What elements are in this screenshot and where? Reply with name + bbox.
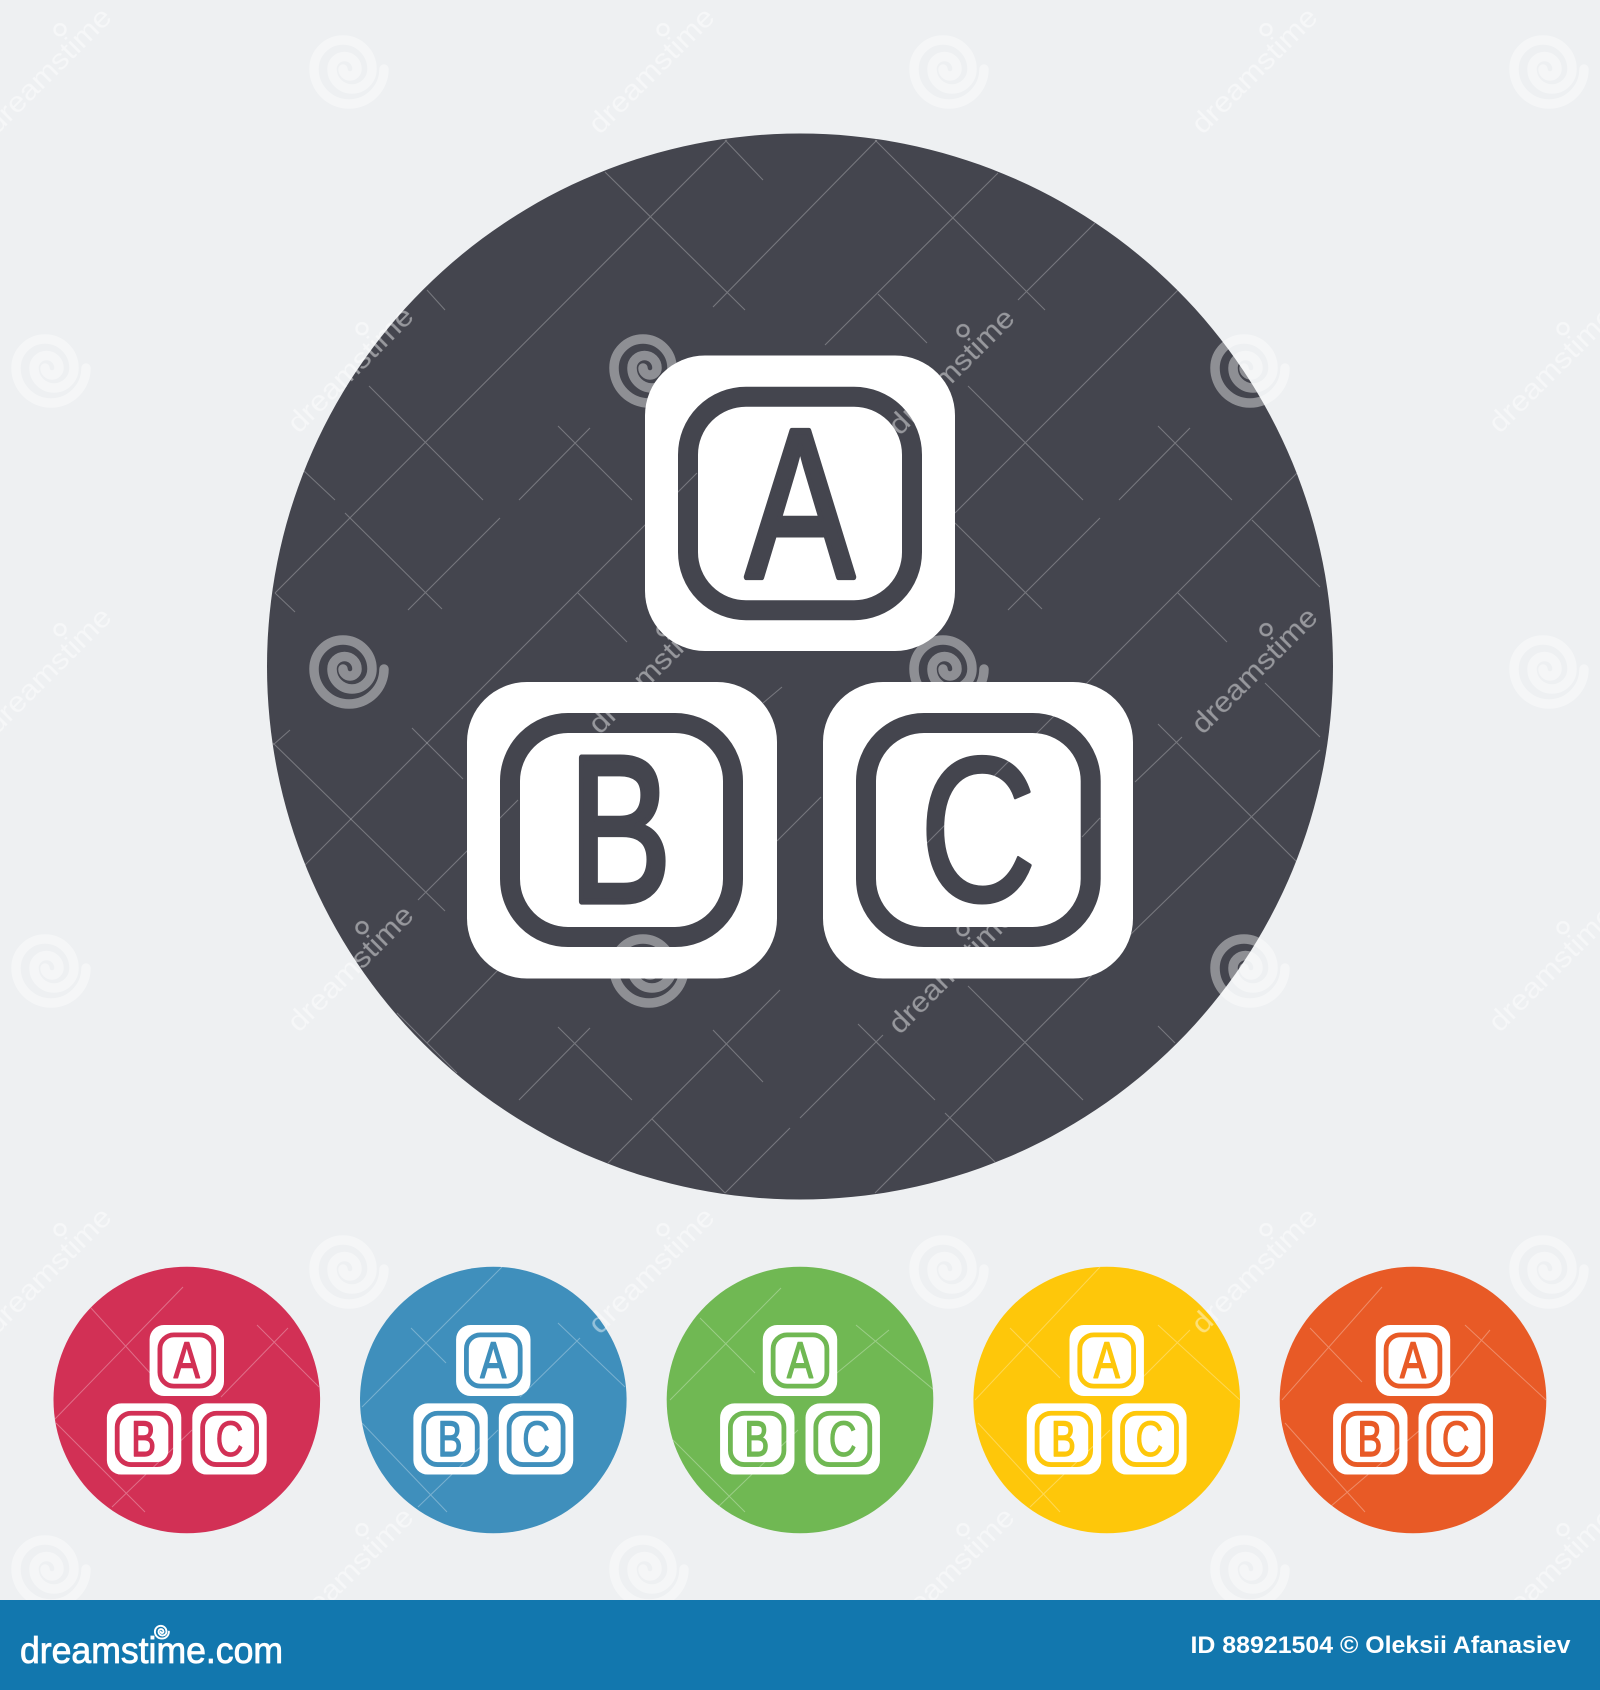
small icon: blue xyxy=(360,1267,627,1533)
footer logo text: dreamstime.com xyxy=(20,1630,283,1671)
small icon: orange: A xyxy=(1400,1332,1427,1389)
footer bar xyxy=(0,1600,1600,1690)
small icon: orange xyxy=(1280,1267,1546,1533)
small icon: green: A xyxy=(787,1332,814,1389)
small icon: orange: C xyxy=(1442,1413,1470,1467)
small icon: red: C xyxy=(215,1413,244,1467)
small icon: green xyxy=(667,1267,934,1533)
small icon: green: C xyxy=(829,1413,857,1467)
block B: B xyxy=(569,713,671,946)
small icon: red: A xyxy=(174,1332,200,1389)
small icon: blue: A xyxy=(480,1332,507,1389)
small icon: yellow xyxy=(973,1267,1240,1533)
small icon: red xyxy=(54,1267,320,1533)
block A xyxy=(645,356,955,651)
small icon: yellow: C xyxy=(1135,1413,1163,1467)
small icon: blue: C xyxy=(522,1413,550,1467)
small icon: green: B xyxy=(744,1412,769,1467)
block A: A xyxy=(746,386,854,623)
block C xyxy=(823,682,1133,978)
small icon: red: B xyxy=(131,1412,156,1467)
small icon: orange: B xyxy=(1357,1412,1382,1467)
block C: C xyxy=(919,715,1037,946)
block B xyxy=(467,682,777,978)
main dark circle xyxy=(267,134,1333,1200)
small icon: blue: B xyxy=(438,1412,462,1467)
footer logo swirl xyxy=(155,1626,169,1639)
small icon: yellow: A xyxy=(1094,1332,1120,1389)
footer image id and credit: ID 88921504 © Oleksii Afanasiev xyxy=(1190,1632,1571,1659)
small icon: yellow: B xyxy=(1051,1412,1076,1467)
main icon: dark circle with ABC blocks xyxy=(267,134,1333,1200)
